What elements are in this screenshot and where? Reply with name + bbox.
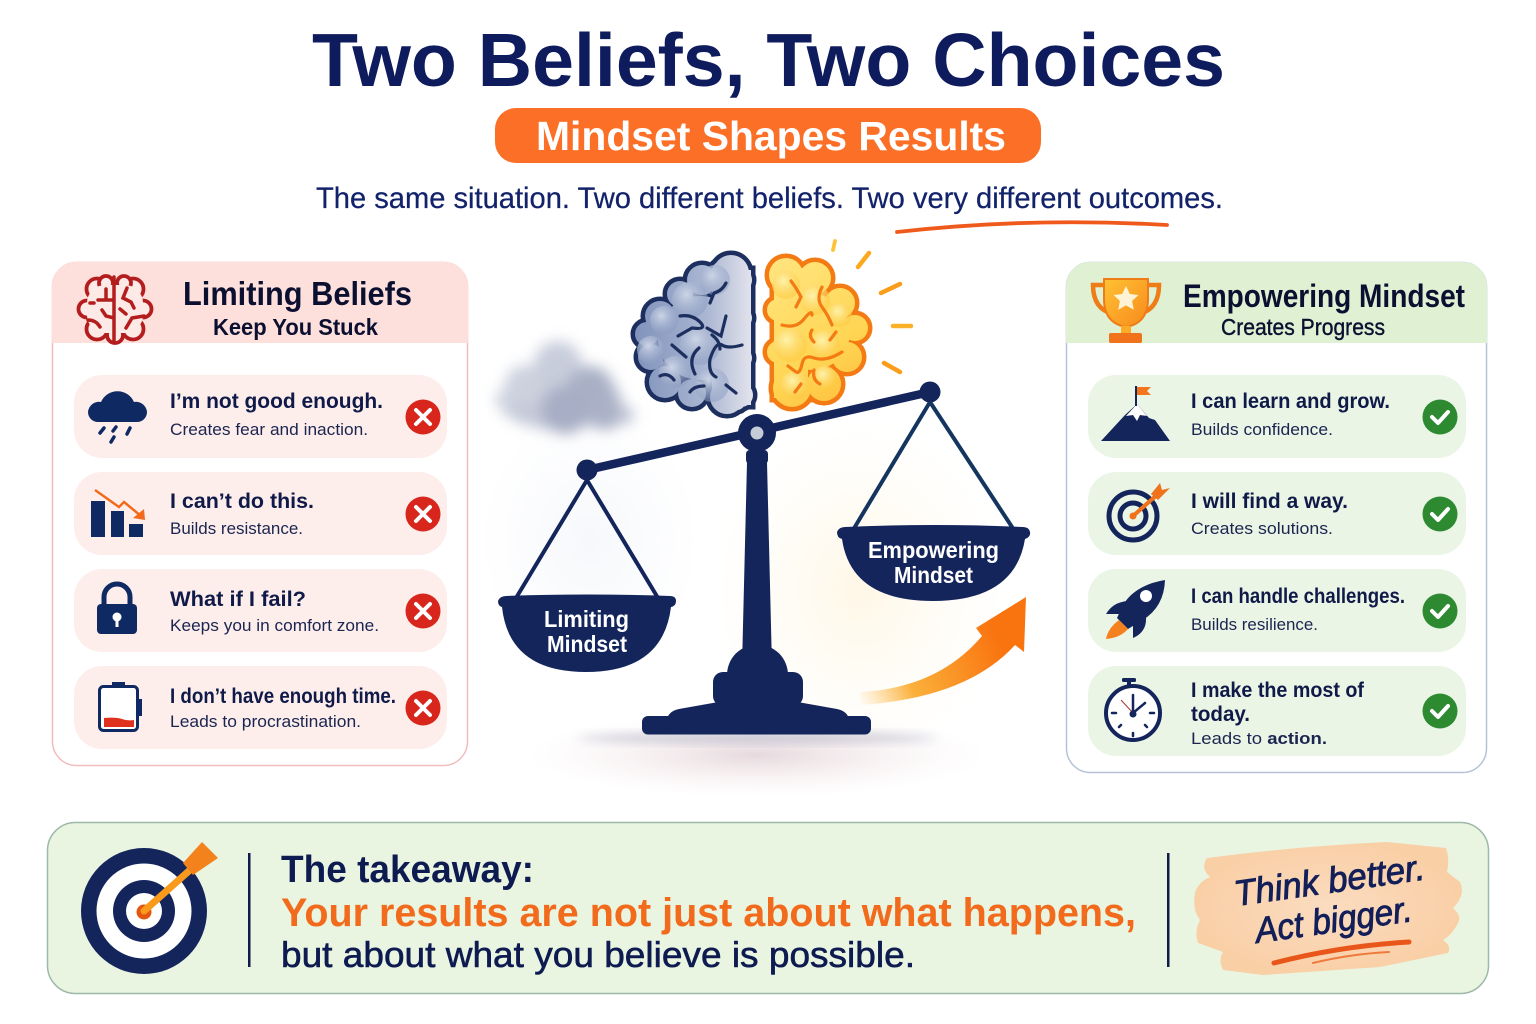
tagline with underline (316, 182, 1223, 232)
panel: limiting beliefs (52, 262, 468, 766)
icon: red x (406, 400, 440, 434)
belief row: learn and grow (1088, 375, 1466, 458)
icon: rocket (1106, 580, 1165, 639)
icon: stopwatch (1106, 678, 1160, 740)
golden brain (767, 258, 868, 407)
belief row: make the most of today: today. (1191, 703, 1250, 726)
icon: mountain with flag (1101, 386, 1170, 441)
icon: padlock (97, 584, 137, 634)
icon: red x (406, 496, 440, 532)
left pan: limiting mindset (498, 480, 676, 672)
brush callout: Think better. (1231, 847, 1427, 914)
central balance scale illustration (480, 241, 1030, 797)
scale beam (576, 382, 940, 480)
belief row: can't do this: Builds resistance. (170, 519, 303, 538)
tagline with underline: The same situation. Two different beliefs. Two very different outcomes. (316, 182, 1223, 215)
icon: falling chart (91, 490, 145, 537)
belief row: handle challenges (1088, 569, 1466, 652)
icon: green check (1422, 400, 1458, 434)
belief row: not enough time (74, 666, 447, 749)
belief row: what if I fail (74, 569, 447, 652)
takeaway text: Your results are not just about what happens, (281, 891, 1136, 935)
icon: red x (406, 690, 440, 726)
belief row: learn and grow: Builds confidence. (1191, 420, 1333, 439)
belief row: find a way: Creates solutions. (1191, 519, 1333, 538)
icon: low battery (100, 682, 142, 730)
belief row: not good enough: Creates fear and inaction. (170, 420, 368, 439)
panel header: empowering mindset: Empowering Mindset (1183, 278, 1465, 314)
panel header: limiting beliefs (52, 262, 468, 343)
icon: green check (1422, 496, 1458, 532)
left pan: limiting mindset: Mindset (547, 631, 627, 657)
belief row: handle challenges: I can handle challenges. (1191, 585, 1405, 608)
right pan: empowering mindset: Empowering (868, 537, 999, 563)
belief row: not enough time: Leads to procrastination. (170, 712, 361, 731)
brush callout (1194, 842, 1462, 975)
belief row: not enough time: I don’t have enough time. (170, 685, 396, 708)
panel header: empowering mindset: Creates Progress (1221, 314, 1385, 340)
belief row: not good enough (74, 375, 447, 458)
sun rays (833, 241, 911, 372)
belief row: can't do this (74, 472, 447, 555)
banner divider left (248, 853, 250, 967)
belief row: learn and grow: I can learn and grow. (1191, 390, 1390, 413)
belief row: handle challenges: Builds resilience. (1191, 615, 1318, 634)
belief row: what if I fail: Keeps you in comfort zone. (170, 616, 379, 635)
takeaway text: but about what you believe is possible. (281, 934, 915, 975)
belief row: make the most of today (1088, 666, 1466, 756)
banner divider right (1167, 853, 1170, 967)
icon: red x (406, 594, 440, 628)
scale stand (642, 450, 871, 734)
icon: trophy (1093, 279, 1159, 343)
title: Two Beliefs, Two Choices (312, 18, 1225, 102)
belief row: not good enough: I’m not good enough. (170, 390, 383, 413)
takeaway text (281, 849, 1136, 975)
panel header: limiting beliefs: Limiting Beliefs (183, 275, 412, 312)
belief row: what if I fail: What if I fail? (170, 588, 306, 611)
takeaway text: The takeaway: (281, 849, 534, 891)
icon: large target with arrow (81, 842, 218, 974)
panel header: limiting beliefs: Keep You Stuck (213, 314, 378, 340)
growth arrow (860, 597, 1026, 705)
belief row: can't do this: I can’t do this. (170, 490, 314, 513)
icon: green check (1422, 594, 1458, 628)
storm cloud (495, 341, 634, 434)
subtitle pill: Mindset Shapes Results (536, 113, 1006, 159)
brush callout: Act bigger. (1251, 888, 1415, 951)
panel header: empowering mindset (1066, 262, 1487, 343)
takeaway banner (48, 822, 1488, 994)
right pan: empowering mindset: Mindset (894, 562, 973, 588)
icon: small target (1109, 483, 1170, 540)
belief row: find a way: I will find a way. (1191, 490, 1348, 513)
left pan: limiting mindset: Limiting (544, 606, 629, 632)
belief row: make the most of today: Leads to action. (1191, 729, 1327, 748)
belief row: make the most of today: I make the most of (1191, 679, 1365, 702)
icon: red brain (78, 276, 152, 343)
right pan: empowering mindset (837, 402, 1030, 601)
icon: green check (1422, 694, 1458, 728)
panel: empowering mindset (1066, 262, 1487, 772)
belief row: find a way (1088, 472, 1466, 555)
grey brain (635, 255, 753, 414)
icon: rain cloud (88, 391, 147, 442)
